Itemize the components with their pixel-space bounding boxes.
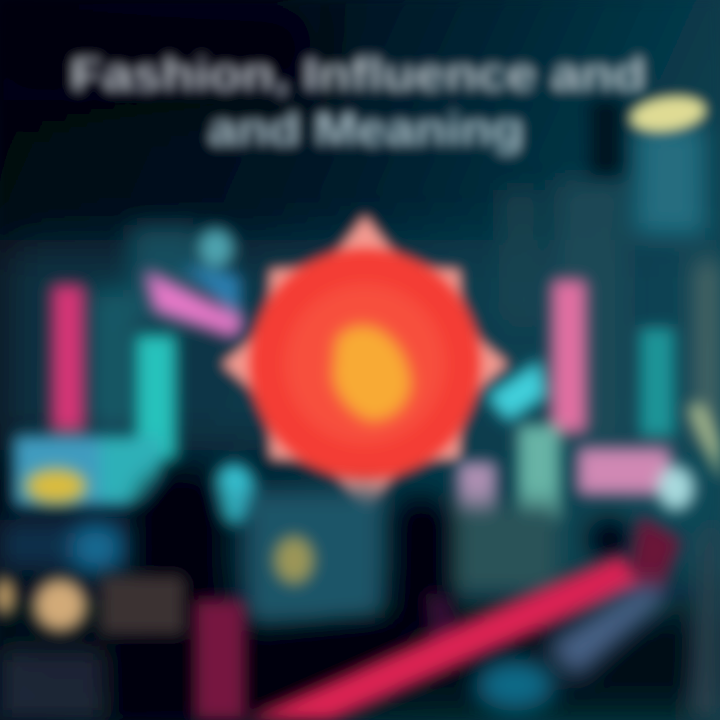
mid buildings [70, 490, 560, 625]
pink tower [552, 280, 586, 432]
mid crimson [425, 590, 462, 650]
right blue road [0, 520, 720, 720]
dark tower behind badge [590, 100, 622, 175]
central sun badge [221, 214, 509, 514]
left crimson pillar [195, 600, 245, 720]
yellow badge [628, 92, 708, 136]
cyan wing [486, 360, 546, 422]
title line 2: and Meaning [208, 103, 524, 155]
olive lamp [274, 536, 314, 584]
platform base glow [0, 520, 130, 570]
red neon road [245, 555, 640, 720]
teal block [518, 425, 560, 520]
outer spikes [221, 214, 509, 514]
glow right [34, 579, 86, 631]
pale block [658, 466, 694, 510]
title line 1: Fashion, Influence and [70, 48, 646, 100]
bronze bar [100, 575, 185, 635]
pink block [578, 448, 670, 494]
yellow window [26, 469, 86, 503]
left neon towers [14, 228, 245, 506]
magenta tower [52, 285, 84, 430]
right silhouette [590, 520, 630, 560]
red disc [249, 248, 481, 480]
glow left [0, 578, 14, 614]
orange core [332, 325, 412, 422]
left silhouette [140, 475, 220, 625]
blue wing [180, 265, 240, 320]
right neon towers [458, 280, 720, 522]
background skyscrapers [90, 125, 720, 440]
crimson pillars [195, 515, 682, 720]
teal tower [136, 335, 176, 460]
warm street lights [0, 536, 314, 635]
right crimson pillar [625, 515, 682, 592]
blue platform [14, 436, 134, 506]
lower shadow [240, 610, 440, 720]
inner ring [285, 284, 445, 444]
teal tower [640, 328, 674, 436]
cyan top [198, 228, 234, 268]
pink wing [145, 270, 245, 338]
lilac block [458, 462, 496, 522]
title [70, 48, 646, 155]
olive streak [688, 402, 720, 480]
cyan lamp [212, 464, 256, 524]
silhouette figures [110, 475, 630, 720]
centre silhouette [395, 500, 450, 625]
